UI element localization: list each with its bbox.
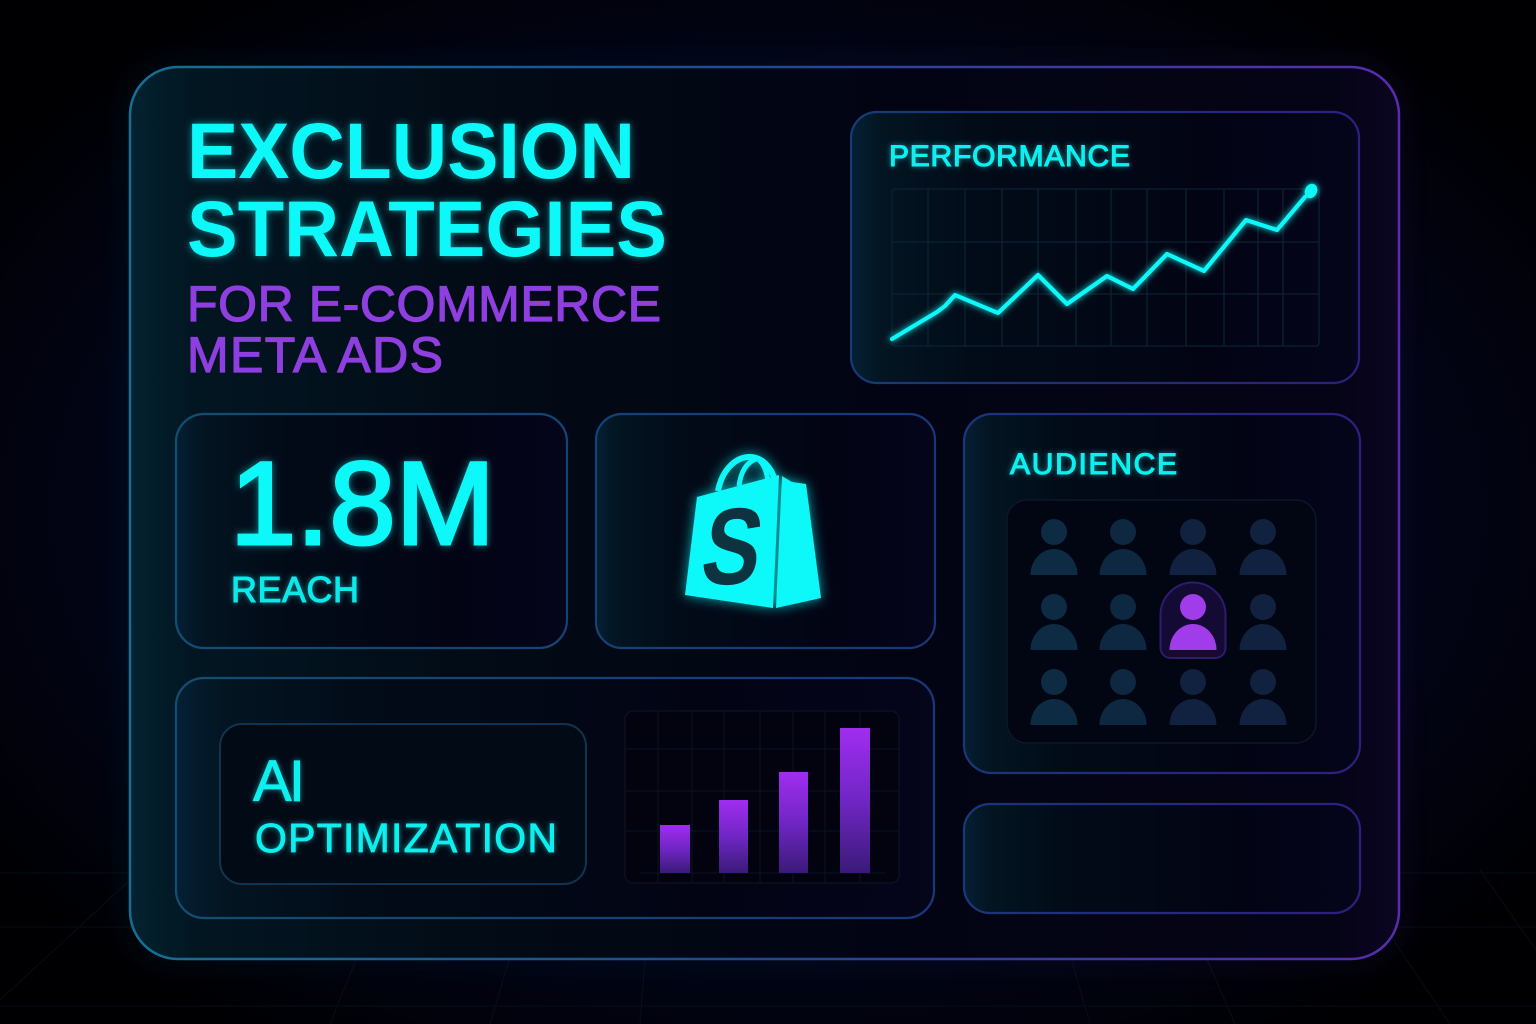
audience grid (1007, 500, 1316, 743)
panel: audience (964, 414, 1360, 773)
subtitle: for e-commerce meta ads: META ADS (187, 327, 443, 383)
value: 1.8M: 1.8M (230, 438, 495, 570)
title: exclusion strategies: EXCLUSION (187, 106, 635, 195)
icon: shopping bag: S (694, 486, 771, 608)
title block (187, 106, 667, 383)
heading: performance: PERFORMANCE (889, 140, 1130, 173)
subtitle: for e-commerce meta ads: FOR E-COMMERCE (187, 276, 661, 332)
bar chart (625, 711, 899, 883)
label: ai: AI (253, 749, 305, 814)
icon: shopping bag (685, 457, 821, 608)
panel: performance (851, 112, 1359, 383)
title: exclusion strategies (187, 106, 667, 273)
line chart: performance trend (892, 182, 1320, 339)
title: exclusion strategies: STRATEGIES (187, 184, 667, 273)
label: reach: REACH (231, 569, 359, 610)
main dashboard panel (129, 66, 1400, 960)
panel: ai optimization (176, 678, 934, 918)
panel: shopify (596, 414, 935, 648)
icon: highlighted person (1160, 582, 1226, 658)
panel: empty card (964, 804, 1360, 913)
card: ai optimization label (220, 724, 586, 884)
label: optimization: OPTIMIZATION (255, 815, 557, 861)
heading: audience: AUDIENCE (1010, 448, 1177, 481)
panel: reach metric (176, 414, 567, 648)
subtitle: for e-commerce meta ads (187, 276, 661, 383)
